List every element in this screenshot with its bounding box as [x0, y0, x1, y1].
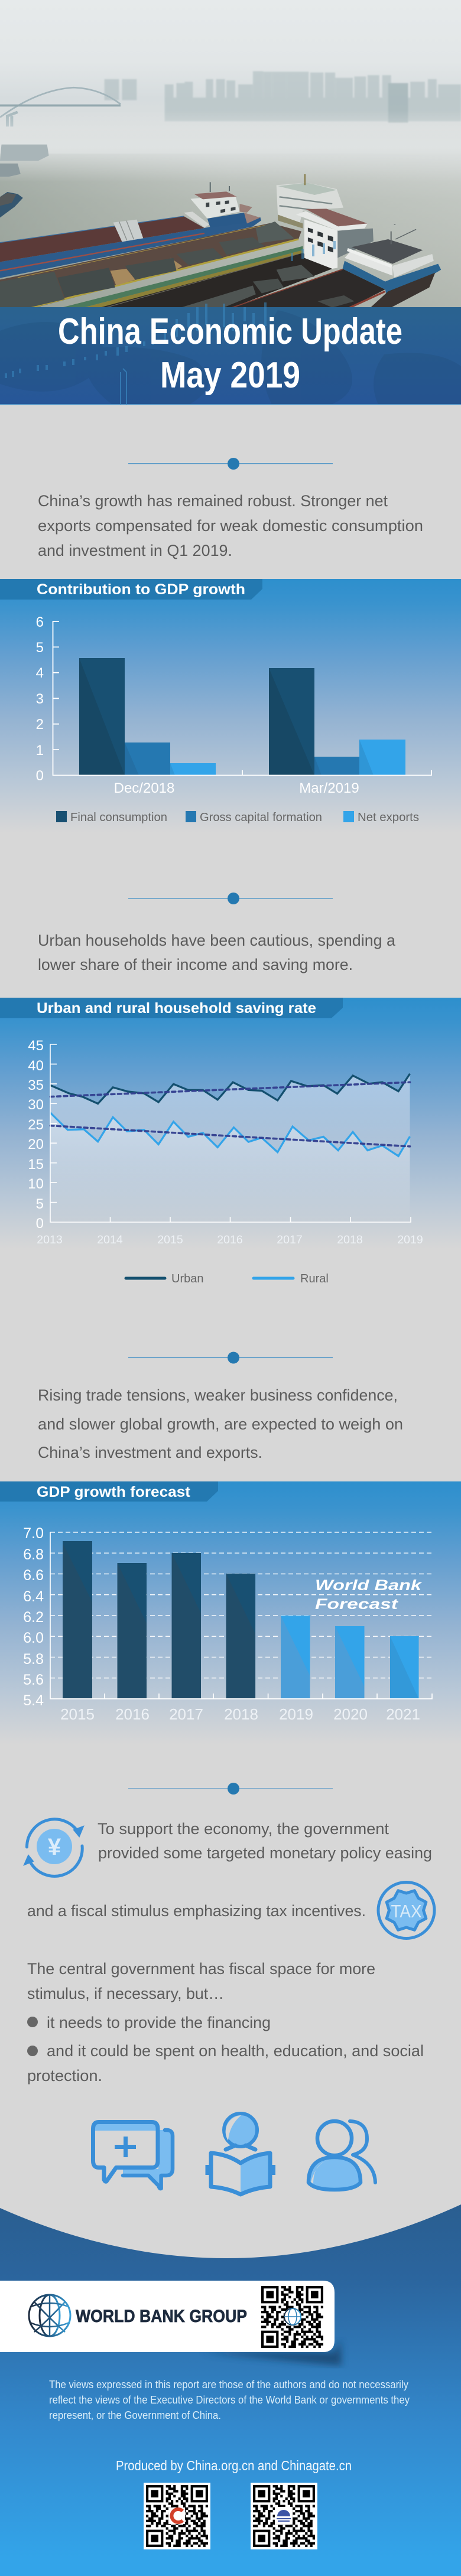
y axis labels: 5.6: [23, 1672, 44, 1688]
x axis labels: 2015: [157, 1233, 183, 1246]
icon: two people: [309, 2121, 375, 2190]
x axis labels: 2018: [337, 1233, 363, 1246]
y axis labels: 25: [28, 1117, 44, 1133]
y axis labels: 1: [36, 742, 44, 758]
y axis labels: 0: [36, 768, 44, 784]
logo: globe: [29, 2295, 70, 2336]
intro text block: and investment in Q1 2019.: [38, 542, 232, 559]
callout: World Bank Forecast: World Bank: [315, 1577, 422, 1594]
text block: trade tensions: and slower global growth, are expected to weigh on: [38, 1415, 403, 1433]
x axis labels: Dec/2018: [114, 780, 174, 796]
x axis labels: 2016: [217, 1233, 243, 1246]
text block: urban households: lower share of their income and saving more.: [38, 956, 353, 973]
card shadow: [201, 2339, 342, 2366]
heading tab: Urban and rural household saving rate: [37, 1000, 316, 1017]
y axis labels: 6.0: [23, 1630, 44, 1646]
panel: urban and rural household saving rate: [0, 998, 461, 1249]
text block: urban households: Urban households have been cautious, spending a: [38, 932, 396, 949]
disclaimer text: reflect the views of the Executive Directors of the World Bank or governments they: [49, 2393, 410, 2406]
barge one and tug: [0, 182, 261, 278]
text block: fiscal space: and it could be spent on health, education, and social: [47, 2042, 424, 2060]
bar chart: [50, 1532, 432, 1699]
divider 1: [128, 458, 333, 470]
text block: fiscal space: stimulus, if necessary, but…: [27, 1985, 224, 2002]
header photo: barges on a foggy river: [0, 0, 461, 308]
heading tab: Contribution to GDP growth: [37, 581, 245, 598]
x axis labels: 2019: [397, 1233, 423, 1246]
small moored ship: [0, 192, 23, 217]
y axis labels: 15: [28, 1157, 44, 1173]
y axis labels: 35: [28, 1077, 44, 1093]
icon: yen cycle: [24, 1819, 83, 1876]
intro text block: exports compensated for weak domestic consumption: [38, 517, 423, 535]
y axis labels: 45: [28, 1038, 44, 1054]
y axis labels: [28, 1038, 44, 1232]
y axis labels: 5: [36, 1196, 44, 1212]
legend: urban and rural: [126, 1272, 329, 1285]
y axis labels: 5: [36, 640, 44, 656]
World Bank Group card: [0, 2281, 335, 2352]
x axis labels: 2021: [386, 1705, 420, 1723]
distant skyline and bridge: [0, 71, 461, 182]
y axis labels: 6.6: [23, 1567, 44, 1584]
x axis labels: [37, 1233, 423, 1246]
legend: [56, 811, 419, 824]
y axis labels: 6.8: [23, 1546, 44, 1563]
y axis labels: 4: [36, 665, 44, 681]
heading tab: [0, 998, 343, 1018]
intro text block: China’s growth has remained robust. Stronger net: [38, 492, 388, 510]
text block: trade tensions: China’s investment and exports.: [38, 1444, 262, 1461]
text block: monetary easing: To support the economy, the government: [98, 1820, 389, 1838]
callout: World Bank Forecast: Forecast: [315, 1596, 399, 1613]
y axis labels: 2: [36, 717, 44, 732]
text block: fiscal space: The central government has fiscal space for more: [27, 1960, 375, 1978]
disclaimer text: The views expressed in this report are those of the authors and do not necessarily: [49, 2378, 409, 2391]
y axis labels: 5.8: [23, 1651, 44, 1668]
x axis labels: [114, 780, 359, 796]
front ship with white cabin: [296, 209, 441, 308]
panel: contribution to GDP growth: [0, 579, 461, 833]
disclaimer text: [49, 2378, 410, 2421]
icon: yen cycle: ¥: [48, 1834, 61, 1860]
divider 2: [128, 893, 333, 904]
left distant ships: [0, 145, 49, 177]
y axis labels: 6.2: [23, 1609, 44, 1626]
x axis labels: 2018: [224, 1705, 258, 1723]
text block: monetary easing: provided some targeted monetary policy easing: [98, 1844, 432, 1862]
y axis labels: 6: [36, 614, 44, 630]
QR code: Chinagate.cn: [251, 2483, 317, 2549]
y axis labels: [36, 614, 44, 784]
y axis labels: 20: [28, 1136, 44, 1152]
icon: tax badge: TAX: [391, 1901, 422, 1922]
text block: fiscal stimulus: and a fiscal stimulus emphasizing tax incentives.: [27, 1902, 366, 1920]
callout: World Bank Forecast: [315, 1577, 422, 1613]
heading tab: [0, 579, 262, 600]
text block: urban households: [38, 932, 396, 973]
x axis labels: Mar/2019: [299, 780, 359, 796]
text block: fiscal space: protection.: [27, 2067, 102, 2085]
y axis labels: 7.0: [23, 1525, 44, 1542]
legend: Net exports: [358, 811, 419, 824]
candlestick texture: [6, 241, 335, 378]
x axis labels: 2015: [60, 1705, 95, 1723]
y axis labels: 5.4: [23, 1692, 44, 1709]
credit line: Produced by China.org.cn and Chinagate.cn: [116, 2458, 352, 2473]
map texture: [0, 310, 461, 405]
disclaimer text: represent, or the Government of China.: [49, 2409, 221, 2421]
text block: trade tensions: Rising trade tensions, weaker business confidence,: [38, 1386, 398, 1404]
footer background with curved edge: [0, 2204, 461, 2576]
y axis labels: [23, 1525, 44, 1709]
x axis labels: 2016: [115, 1705, 150, 1723]
x axis labels: 2017: [277, 1233, 303, 1246]
text block: trade tensions: [38, 1386, 403, 1461]
bar chart: [53, 621, 431, 775]
legend: urban and rural: Rural: [300, 1272, 329, 1285]
line chart: [50, 1044, 411, 1222]
x axis labels: 2013: [37, 1233, 63, 1246]
legend: Final consumption: [70, 811, 167, 824]
y axis labels: 30: [28, 1097, 44, 1113]
icon: health chat bubbles: [93, 2122, 173, 2189]
y axis labels: 6.4: [23, 1588, 44, 1605]
barge two with steel cargo: [0, 222, 303, 308]
icon: tax badge: [378, 1882, 434, 1939]
y axis labels: 0: [36, 1216, 44, 1232]
icon: person reading a book: [206, 2113, 275, 2194]
y axis labels: 10: [28, 1176, 44, 1192]
heading tab: [0, 1481, 218, 1502]
x axis labels: 2019: [279, 1705, 313, 1723]
divider 3: [128, 1351, 333, 1363]
y axis labels: 40: [28, 1058, 44, 1074]
x axis labels: 2020: [333, 1705, 368, 1723]
x axis labels: 2017: [169, 1705, 203, 1723]
x axis labels: [60, 1705, 420, 1723]
QR code: World Bank: [261, 2286, 323, 2348]
intro text block: [38, 492, 423, 559]
QR code: China.org.cn: [144, 2483, 210, 2549]
divider 4: [128, 1783, 333, 1795]
title banner: May 2019: [160, 355, 300, 396]
logo wordmark: WORLD BANK GROUP: [76, 2307, 247, 2326]
y axis labels: 3: [36, 691, 44, 707]
heading tab: GDP growth forecast: [37, 1484, 191, 1500]
panel: GDP growth forecast: [0, 1481, 461, 1744]
barge three: [100, 253, 385, 308]
legend: urban and rural: Urban: [171, 1272, 203, 1285]
far white-decked ship: [277, 174, 343, 229]
x axis labels: 2014: [97, 1233, 123, 1246]
text block: fiscal space: it needs to provide the financing: [47, 2014, 271, 2031]
text block: fiscal space: [27, 1960, 424, 2085]
text block: monetary easing: [98, 1820, 432, 1862]
title banner: [0, 241, 461, 405]
legend: Gross capital formation: [200, 811, 322, 824]
